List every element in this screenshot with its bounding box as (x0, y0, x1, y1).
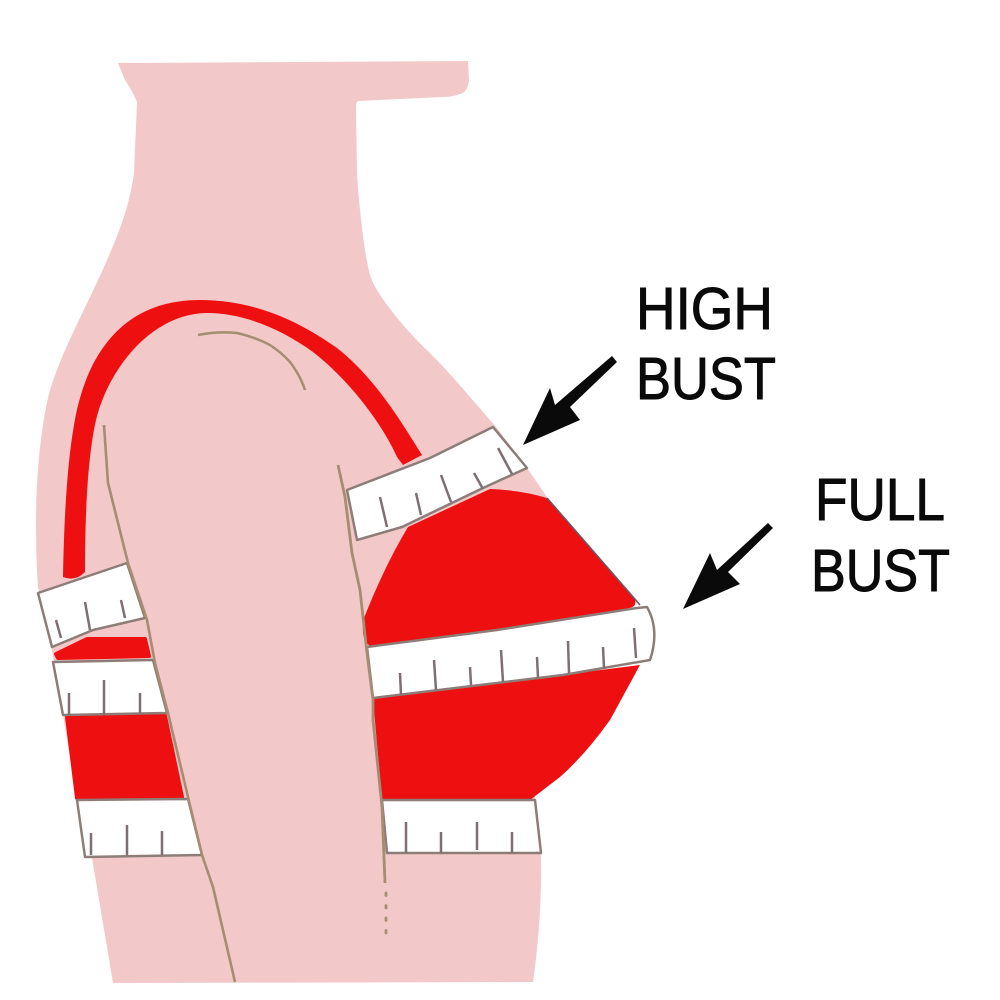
label: high bust: HIGH (636, 276, 773, 342)
label: full bust (811, 467, 950, 604)
arrow: high bust (523, 356, 617, 445)
bra cup lower (373, 665, 640, 800)
tape: underbust back (77, 799, 202, 857)
label: high bust (636, 276, 776, 412)
bra cup upper (363, 489, 635, 646)
bra strap (63, 300, 422, 579)
shoulder curve line (198, 332, 305, 390)
tape: underbust front (382, 800, 541, 853)
tape: full bust front (367, 607, 654, 698)
bra back lower band (67, 716, 182, 798)
tape: full bust back (53, 660, 167, 715)
body silhouette (36, 61, 547, 983)
bra back upper band (56, 639, 149, 658)
tape: high bust front (347, 427, 527, 540)
bra cup edge (547, 498, 640, 605)
arm outline: back edge (104, 425, 235, 982)
label: full bust: FULL (815, 467, 945, 533)
tape: high bust back (38, 563, 145, 647)
arm outline: front edge (338, 465, 386, 935)
arrow: full bust (683, 523, 773, 609)
label: high bust: BUST (636, 346, 776, 412)
label: full bust: BUST (811, 538, 950, 604)
